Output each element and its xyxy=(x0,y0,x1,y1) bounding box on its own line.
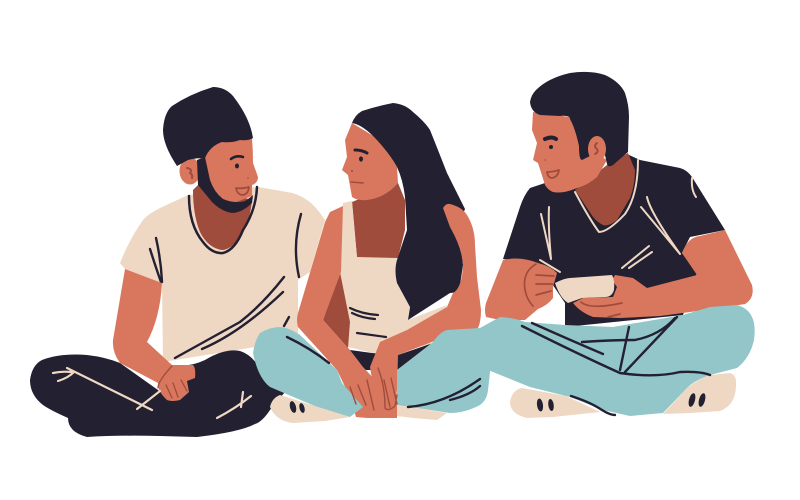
left man neck xyxy=(193,185,252,250)
right man neck xyxy=(575,153,635,225)
woman left arm xyxy=(297,206,379,417)
woman waist xyxy=(350,343,433,370)
woman dark arm shadow xyxy=(323,272,350,348)
right man face xyxy=(532,112,607,192)
right man feet xyxy=(510,373,736,418)
right man left arm xyxy=(485,259,557,320)
right man shirt xyxy=(503,155,725,327)
right man facial details xyxy=(544,138,559,178)
figure: right man xyxy=(485,72,755,418)
right man trouser folds xyxy=(522,317,710,415)
woman feet xyxy=(270,395,447,423)
right man bowl xyxy=(555,275,614,303)
right man ear xyxy=(588,136,606,162)
left man fingers xyxy=(158,366,187,398)
right man trousers xyxy=(488,305,755,416)
right man right arm xyxy=(573,230,753,318)
left man pants folds xyxy=(53,368,251,418)
left man shirt folds xyxy=(150,214,301,358)
woman trouser folds xyxy=(287,337,480,407)
left man hair xyxy=(163,87,253,166)
left man face xyxy=(198,132,258,208)
right man shirt folds xyxy=(541,178,696,268)
woman right arm xyxy=(370,204,481,410)
woman neck and chest xyxy=(352,183,405,258)
left man arm xyxy=(113,269,195,401)
woman tank top xyxy=(340,201,447,353)
figure: left man xyxy=(30,87,325,437)
left man shirt xyxy=(120,187,325,362)
woman teal trousers right xyxy=(397,317,500,413)
left man ear xyxy=(180,158,200,184)
left man beard xyxy=(197,157,253,213)
left man facial details xyxy=(231,156,249,195)
right man collar xyxy=(575,160,638,232)
right man chopsticks xyxy=(540,260,560,272)
figure: woman xyxy=(253,103,500,423)
woman top folds xyxy=(350,308,386,337)
left man collar xyxy=(189,187,257,253)
woman hair xyxy=(352,103,465,320)
woman teal trousers left xyxy=(253,327,363,417)
woman face xyxy=(342,123,398,200)
right man hand details xyxy=(524,264,622,317)
right man hair xyxy=(530,72,629,166)
woman hands details xyxy=(350,368,397,410)
woman facial details xyxy=(351,150,367,183)
left man pants xyxy=(30,350,285,437)
